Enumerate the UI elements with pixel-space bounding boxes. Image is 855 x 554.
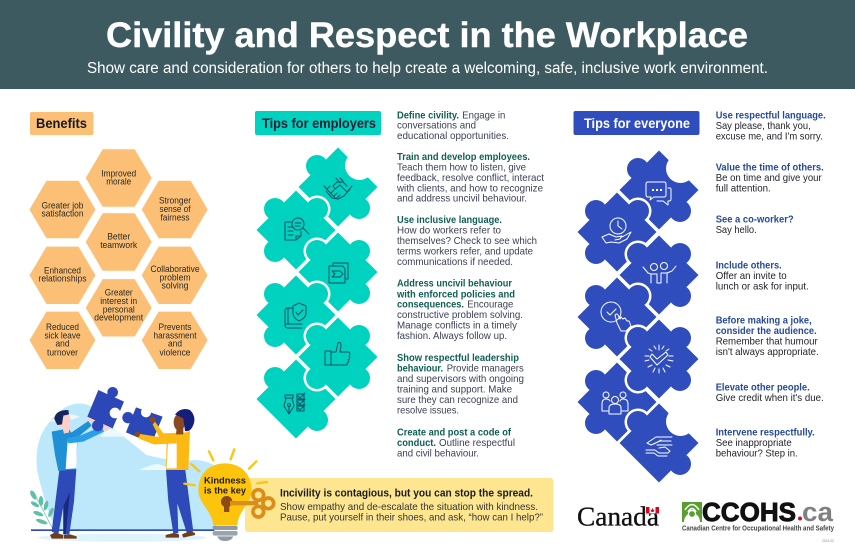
- hexagon: greater interest in personal development: personal: [103, 304, 135, 314]
- tip: address uncivil behaviour: Manage conflicts in a timely: [397, 320, 518, 332]
- tip: use respectful language: [716, 110, 826, 142]
- tip: show respectful leadership behaviour: training and support. Make: [397, 384, 512, 396]
- tip: create and post a code of conduct: Outline respectful: [439, 438, 515, 449]
- ground: [31, 529, 214, 531]
- tip: before making a joke: Before making a joke,: [716, 316, 812, 327]
- puzzle piece: book and shield: [256, 276, 336, 354]
- hexagon: prevents harassment and violence: Prevents: [158, 322, 192, 332]
- publication date: 2021-02: [822, 539, 834, 543]
- clouds: [50, 414, 170, 470]
- tip: define civility: Engage in: [462, 110, 505, 122]
- puzzle piece held by woman: [122, 407, 163, 443]
- tip: address uncivil behaviour: consequences.: [397, 300, 464, 310]
- tip: address uncivil behaviour: fashion. Always follow up.: [397, 331, 507, 342]
- tip: use inclusive language: [397, 215, 537, 268]
- tip: use respectful language: excuse me, and I'm sorry.: [716, 132, 823, 142]
- subtitle: Show care and consideration for others to help create a welcoming, safe, inclusive work environment.: [87, 60, 768, 77]
- tip: show respectful leadership behaviour: Show respectful leadership: [397, 353, 519, 364]
- hexagon: collaborative problem solving: [142, 247, 208, 304]
- tip: use inclusive language: How do workers refer to: [397, 226, 501, 236]
- hexagon: greater interest in personal development: [86, 279, 152, 336]
- tip: value the time of others: full attention.: [716, 184, 771, 194]
- tip: use inclusive language: themselves? Check to see which: [397, 236, 537, 247]
- hexagon: improved morale: morale: [106, 177, 131, 187]
- icon: kindness light bulb and key: [184, 449, 274, 541]
- hexagon: prevents harassment and violence: and: [168, 339, 182, 349]
- tip: address uncivil behaviour: constructive problem solving.: [397, 310, 523, 321]
- tip: elevate other people: [716, 383, 824, 404]
- tip: define civility: Define civility.: [397, 110, 459, 122]
- tip: before making a joke: Remember that humour: [716, 336, 818, 348]
- tip: before making a joke: [716, 316, 819, 358]
- heading: tips for employers: [255, 111, 381, 135]
- kindness label: Kindness: [204, 475, 246, 486]
- tip: train and develop employees: Teach them how to listen, give: [397, 162, 526, 173]
- icon: Canadian flag: [646, 507, 659, 514]
- hexagon: prevents harassment and violence: [142, 312, 208, 369]
- hexagon: greater job satisfaction: satisfaction: [42, 209, 84, 219]
- puzzle piece: hand pressing check: [578, 278, 656, 356]
- tip: address uncivil behaviour: Address uncivil behaviour: [397, 278, 512, 290]
- hexagon: greater interest in personal development: development: [94, 313, 144, 323]
- tip: use inclusive language: terms workers refer, and update: [397, 246, 533, 258]
- background blob: [36, 403, 217, 530]
- hexagon: stronger sense of fairness: fairness: [160, 212, 190, 222]
- tip: see a co-worker: [716, 215, 794, 236]
- puzzle piece: group of people: [578, 362, 656, 442]
- tips for everyone text: [716, 110, 826, 460]
- hexagon: stronger sense of fairness: [142, 181, 208, 238]
- hexagon: enhanced relationships: relationships: [38, 274, 87, 284]
- hexagon: better teamwork: Better: [107, 232, 130, 242]
- CCOHS wordmark: CCOHS: [702, 497, 796, 527]
- icon: CCOHS emblem: [682, 502, 702, 522]
- puzzle piece: speech bubbles: [620, 150, 698, 230]
- logo: Canada wordmark: Canada: [577, 502, 659, 532]
- tip: intervene respectfully: Intervene respectfully.: [716, 428, 815, 439]
- tip: value the time of others: [716, 163, 824, 194]
- heading: benefits: Benefits: [36, 116, 87, 131]
- tip: use respectful language: Say please, thank you,: [716, 121, 811, 132]
- tip: elevate other people: Elevate other people.: [716, 383, 810, 394]
- callout: incivility is contagious: Incivility is contagious, but you can stop the spread.: [280, 488, 533, 500]
- tip: train and develop employees: [396, 152, 544, 204]
- bulb: [198, 463, 252, 541]
- puzzle piece: thumbs up: [298, 318, 378, 396]
- hexagon: stronger sense of fairness: sense of: [160, 204, 191, 214]
- callout: incivility is contagious: Show empathy and de-escalate the situation with kindness.: [280, 502, 538, 513]
- tip: intervene respectfully: See inappropriate: [716, 438, 792, 449]
- tip: include others: lunch or ask for input.: [716, 282, 809, 292]
- tip: address uncivil behaviour: with enforced policies and: [396, 290, 515, 300]
- tip: see a co-worker: See a co-worker?: [716, 215, 794, 226]
- heading: tips for employers: Tips for employers: [262, 116, 376, 131]
- tip: show respectful leadership behaviour: Provide managers: [447, 364, 524, 374]
- tip: include others: [716, 261, 809, 292]
- tip: elevate other people: Give credit when it's due.: [716, 393, 824, 404]
- man: [50, 410, 109, 539]
- illustration: two people joining puzzle pieces: [29, 387, 217, 542]
- heading: tips for everyone: Tips for everyone: [584, 116, 690, 131]
- hexagon: greater interest in personal development: Greater: [105, 288, 133, 298]
- hexagon: improved morale: [86, 149, 152, 207]
- hexagon: enhanced relationships: Enhanced: [44, 265, 81, 275]
- tip: address uncivil behaviour: [396, 278, 523, 342]
- tip: define civility: [397, 110, 509, 142]
- tip: train and develop employees: and address uncivil behaviour.: [397, 194, 527, 204]
- woman: [135, 409, 195, 538]
- heading: tips for everyone: [574, 111, 700, 135]
- tip: before making a joke: isn't always appropriate.: [716, 347, 819, 358]
- puzzle piece: handshake: [298, 148, 378, 226]
- puzzle piece held by man: [87, 387, 124, 431]
- heading: benefits: [30, 112, 94, 135]
- tip: value the time of others: Be on time and give your: [716, 173, 822, 184]
- tip: create and post a code of conduct: conduct.: [397, 438, 436, 449]
- tip: use inclusive language: communications if needed.: [397, 257, 513, 268]
- puzzle piece: exchanged documents: [298, 232, 378, 312]
- tip: before making a joke: consider the audience.: [716, 326, 817, 337]
- tip: see a co-worker: Say hello.: [716, 225, 757, 236]
- tip: include others: Offer an invite to: [716, 271, 787, 282]
- callout: incivility is contagious: Pause, put yourself in their shoes, and ask, “how can I help?”: [280, 513, 543, 524]
- tip: intervene respectfully: behaviour? Step in.: [716, 448, 798, 460]
- hexagon: reduced sick leave and turnover: Reduced: [46, 322, 79, 332]
- hexagon: enhanced relationships: [30, 247, 96, 304]
- hexagon: reduced sick leave and turnover: sick leave: [44, 330, 80, 340]
- callout: incivility is contagious: [245, 478, 554, 532]
- tip: create and post a code of conduct: Create and post a code of: [397, 428, 511, 439]
- icon: kindness light bulb and key: is the key: [204, 485, 247, 496]
- tip: include others: Include others.: [716, 261, 782, 272]
- hexagon: greater interest in personal development: interest in: [100, 296, 137, 306]
- puzzle piece: friends with raised arms: [620, 236, 698, 314]
- tip: intervene respectfully: [716, 428, 815, 460]
- tip: train and develop employees: Train and develop employees.: [397, 152, 530, 163]
- hexagon: improved morale: Improved: [101, 168, 136, 178]
- hexagon: reduced sick leave and turnover: [30, 312, 96, 369]
- hexagon: reduced sick leave and turnover: and: [56, 339, 70, 349]
- hexagon: collaborative problem solving: problem: [160, 272, 190, 282]
- logo: CCOHS: ca: [802, 497, 834, 527]
- tip: show respectful leadership behaviour: [397, 353, 524, 416]
- panel: tips for employers puzzle: [255, 110, 544, 460]
- tip: use respectful language: Use respectful language.: [716, 110, 826, 122]
- hexagon: collaborative problem solving: solving: [162, 281, 188, 291]
- puzzle piece: pen nib and checklist: [256, 360, 336, 438]
- tip: train and develop employees: with clients, and how to recognize: [396, 184, 543, 194]
- hexagon: greater job satisfaction: [30, 181, 96, 238]
- tip: address uncivil behaviour: Encourage: [467, 300, 513, 310]
- panel: benefits: [30, 112, 208, 369]
- logo: CCOHS: [682, 497, 835, 533]
- tip: define civility: conversations and: [397, 121, 476, 132]
- hexagon: reduced sick leave and turnover: turnover: [47, 347, 78, 357]
- hexagon: better teamwork: [86, 213, 152, 271]
- hexagon: better teamwork: teamwork: [100, 240, 138, 250]
- hexagon: prevents harassment and violence: violence: [160, 347, 190, 357]
- tip: create and post a code of conduct: and civil behaviour.: [397, 448, 479, 460]
- hexagon: collaborative problem solving: Collaborative: [150, 264, 200, 274]
- puzzle piece: clock in hand: [578, 192, 656, 272]
- puzzle piece: hands helping: [620, 404, 698, 482]
- puzzle piece: document and magnifier: [256, 190, 336, 270]
- tip: show respectful leadership behaviour: and supervisors with ongoing: [397, 374, 524, 385]
- key: [221, 490, 274, 517]
- tip: create and post a code of conduct: [397, 428, 515, 460]
- tip: show respectful leadership behaviour: behaviour.: [397, 364, 443, 374]
- hexagon: stronger sense of fairness: Stronger: [159, 196, 191, 206]
- tips for employers text: [396, 110, 544, 460]
- tip: train and develop employees: feedback, resolve conflict, interact: [397, 173, 544, 184]
- hexagon: greater job satisfaction: Greater job: [42, 200, 83, 210]
- title: Civility and Respect in the Workplace: [106, 16, 748, 55]
- plant: [29, 489, 55, 530]
- tip: show respectful leadership behaviour: resolve issues.: [397, 406, 459, 416]
- tip: define civility: educational opportunities.: [397, 131, 509, 142]
- bulb rays: [184, 449, 267, 485]
- panel: tips for everyone puzzle: [574, 110, 826, 482]
- hexagon: prevents harassment and violence: harassment: [154, 330, 197, 340]
- tip: show respectful leadership behaviour: sure they can recognize and: [397, 395, 518, 406]
- puzzle piece: burst check: [620, 320, 698, 398]
- tip: use inclusive language: Use inclusive language.: [397, 215, 502, 226]
- tip: value the time of others: Value the time of others.: [716, 163, 824, 174]
- header band: [0, 0, 855, 89]
